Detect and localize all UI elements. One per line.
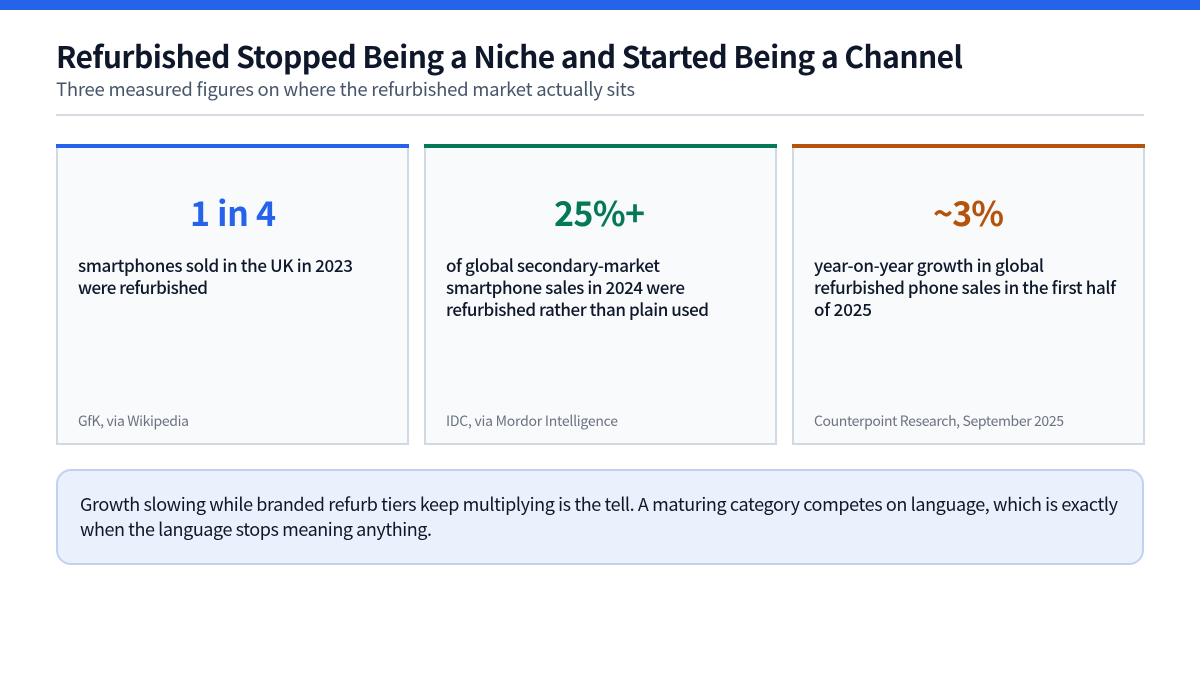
description — [446, 252, 709, 321]
description: smartphone sales in 2024 were — [446, 274, 685, 299]
description: refurbished rather than plain used — [446, 296, 709, 321]
callout: when the language stops meaning anything. — [80, 516, 432, 542]
subtitle: Three measured figures on where the refurbished market actually sits — [56, 76, 635, 102]
description: refurbished phone sales in the first half — [814, 274, 1117, 299]
panel: growth — [792, 144, 1145, 444]
source: Counterpoint Research, September 2025 — [814, 411, 1064, 431]
source: GfK, via Wikipedia — [78, 411, 189, 431]
stat: 1 in 4: 1 in 4 — [190, 187, 276, 236]
source: IDC, via Mordor Intelligence — [446, 411, 618, 431]
description — [814, 252, 1117, 321]
description: of global secondary-market — [446, 252, 660, 277]
panel: secondary market — [424, 144, 777, 444]
title: Refurbished Stopped Being a Niche and Started Being a Channel — [56, 33, 963, 77]
description: smartphones sold in the UK in 2023 — [78, 252, 353, 277]
stat: ~3%: ~3% — [933, 187, 1004, 236]
description: year-on-year growth in global — [814, 252, 1044, 277]
callout — [57, 470, 1143, 564]
callout: Growth slowing while branded refurb tiers keep multiplying is the tell. A maturing category competes on language, which is exactly — [80, 491, 1119, 517]
stat: 25%+: 25%+ — [554, 187, 645, 236]
top accent bar — [0, 0, 1200, 10]
description — [78, 252, 353, 299]
panel: UK smartphones — [56, 144, 409, 444]
description: of 2025 — [814, 296, 872, 321]
description: were refurbished — [78, 274, 208, 299]
